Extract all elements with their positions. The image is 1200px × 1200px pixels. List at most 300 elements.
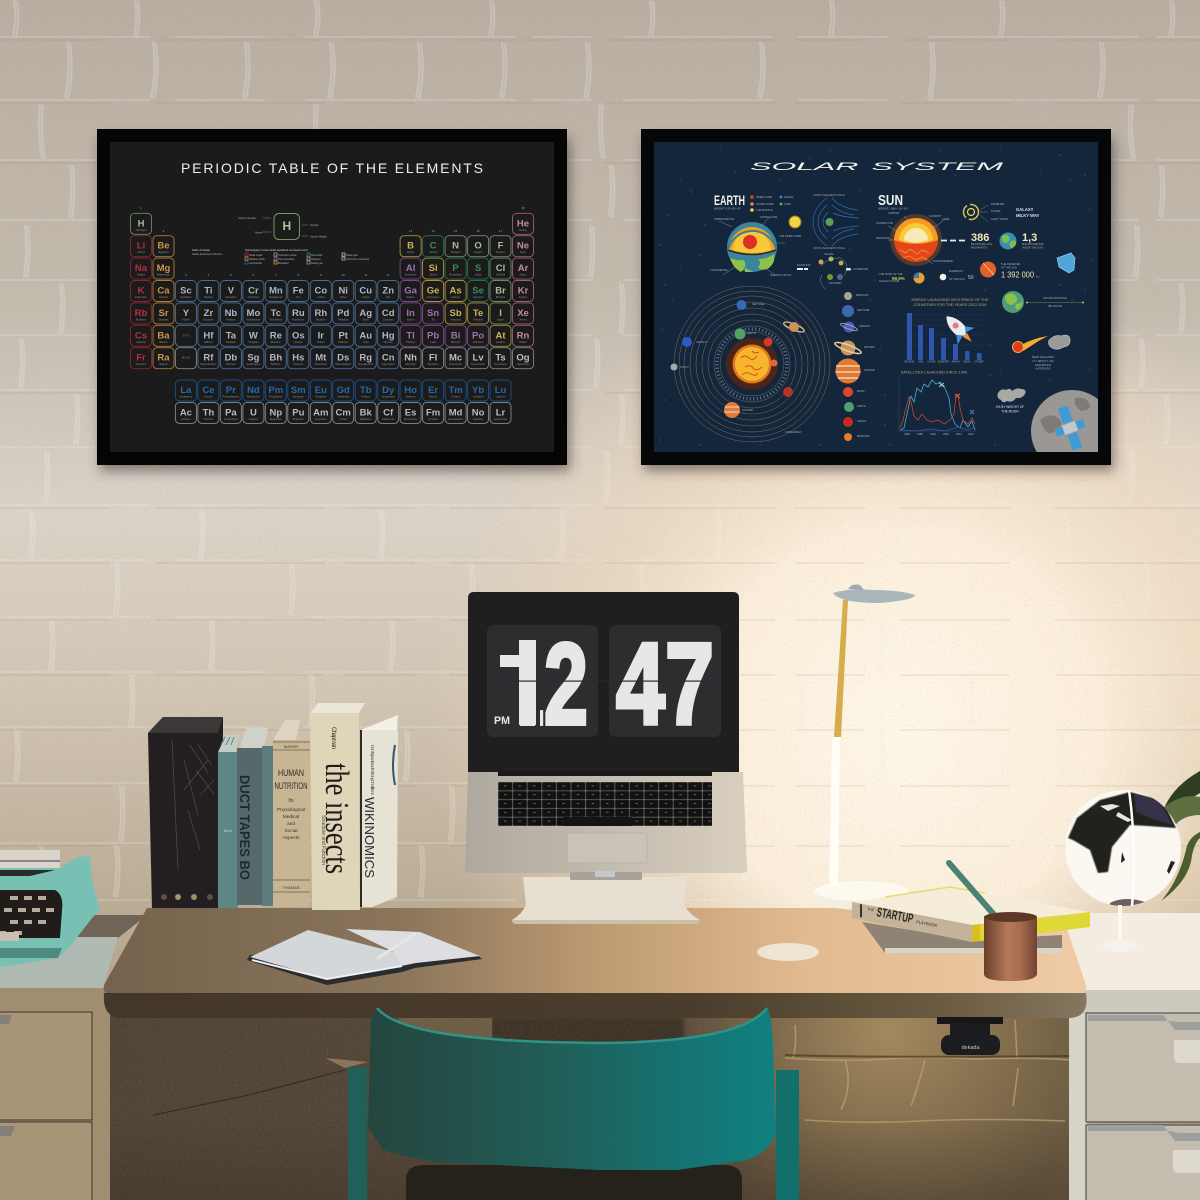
period 6: Caesium: [136, 341, 146, 344]
stat: 386: [971, 232, 992, 250]
period 1: [130, 213, 534, 234]
earth cross section: OUTER CORE: [760, 215, 778, 219]
period 4: Selenium: [473, 296, 483, 299]
period 2: B: [407, 241, 414, 252]
period 6: Gold: [363, 341, 369, 344]
actinides: Californium: [382, 418, 395, 421]
period 5: In: [406, 308, 415, 319]
group numbers: 15: [454, 229, 458, 233]
period 6: Tantalum: [226, 341, 236, 344]
lower drawer: [1086, 1125, 1200, 1200]
cabinet face: [0, 988, 110, 1200]
small earth and stat 1,3: 1,3: [1022, 232, 1037, 244]
cabinet top: [1056, 913, 1200, 990]
moon rocks and caption: [996, 388, 1026, 414]
sun cross section: [876, 211, 953, 266]
small earth and stat 1,3: MILLION EARTHS: [1022, 242, 1044, 246]
lanthanides: Lu: [495, 385, 506, 396]
period 6: Re: [270, 330, 282, 341]
gold pole: [834, 600, 848, 737]
period 7: Oganesson: [517, 363, 530, 366]
lanthanides: Thulium: [451, 396, 460, 398]
period 4: Nickel: [340, 296, 347, 299]
period 7: Darmstadtium: [335, 363, 351, 366]
period 3: P: [452, 263, 459, 274]
element grid: [130, 213, 534, 423]
bar chart: CHINA: [927, 360, 936, 364]
sun: [726, 338, 778, 390]
period 2: Lithium: [137, 251, 145, 254]
actinides: Cm: [336, 407, 351, 418]
period 6: Tungsten: [248, 341, 259, 344]
group numbers: 5: [230, 273, 232, 277]
actinides: Ac: [180, 407, 192, 418]
stat: sun diameter: [980, 262, 1039, 280]
actinides: [175, 402, 511, 423]
lanthanides: Ytterbium: [473, 396, 483, 398]
earth heading: WEIGHT 5.97×10²⁴ KG: [714, 206, 741, 210]
key cell: Atomic Weight: [310, 234, 327, 238]
line chart: 2010: [956, 432, 962, 436]
sun composition charts: [879, 269, 974, 284]
spine with title: [852, 902, 982, 942]
cabinet stile: [1069, 1013, 1087, 1200]
bar chart title: COUNTRIES FOR THE YEARS 2012-2016: [913, 303, 987, 307]
period 1: He: [517, 218, 529, 229]
period 4: Germanium: [427, 296, 440, 299]
actinides: Uranium: [249, 418, 258, 421]
laptop base: [465, 772, 747, 873]
book: the insects: Chapman: [330, 727, 336, 749]
legend: states and subcategories: Noble gas: [346, 253, 358, 257]
period 7: Bh: [269, 353, 282, 364]
period 4: [130, 280, 534, 302]
flip panel left: [487, 625, 598, 737]
globe: [1065, 790, 1181, 952]
period 2: [130, 236, 534, 257]
period 6: Au: [359, 330, 372, 341]
line chart: [899, 378, 976, 436]
group numbers: 16: [477, 229, 480, 233]
trackpad: [567, 833, 647, 863]
group numbers: 11: [364, 273, 368, 277]
period 6: Mercury: [384, 341, 393, 344]
period 2: Ne: [517, 241, 529, 252]
period 7: Ts: [495, 353, 506, 364]
framed poster: solar system: [641, 129, 1113, 472]
actinides: Mendelevium: [448, 418, 463, 421]
book: duct tapes: [237, 728, 268, 905]
screen: [468, 592, 739, 772]
line chart: 1980: [917, 432, 923, 436]
desk clamp: [937, 1017, 1003, 1055]
drawer handles: [0, 1015, 15, 1136]
period 7: Mt: [315, 353, 327, 364]
right page: [346, 929, 480, 966]
period 7: Flerovium: [428, 363, 439, 366]
period 5: Ruthenium: [292, 318, 304, 321]
bar chart: [900, 313, 985, 364]
teal book: Book: [224, 829, 232, 833]
period 5: Indium: [407, 318, 414, 321]
actinides: Pa: [225, 407, 237, 418]
desk top surface: [104, 908, 1086, 996]
period 6: Osmium: [294, 341, 303, 344]
comet and asteroid: FLY ABOUT 1 110: [1032, 359, 1054, 363]
galaxy: GALAXY: [1016, 207, 1034, 212]
galaxy: DIAMETER: [991, 202, 1005, 206]
period 3: Chlorine: [496, 274, 506, 277]
lanthanides: Ho: [404, 385, 417, 396]
period 2: Boron: [407, 251, 415, 254]
period 7: Mc: [449, 353, 462, 364]
galaxy: [964, 202, 1039, 222]
legend: states and subcategories: Metalloid: [278, 261, 289, 265]
typewriter: [0, 850, 100, 967]
chair rim: [377, 1008, 767, 1043]
comet and asteroid: NEAR THE EARTH: [1032, 355, 1054, 359]
earth heading: [714, 193, 745, 210]
period 5: [130, 303, 534, 324]
period 7: Cn: [382, 353, 395, 364]
actinides: Einsteinium: [404, 418, 417, 421]
planet column: SATURN: [864, 345, 875, 349]
sun cross section: CORE: [942, 217, 950, 221]
actinides: Plutonium: [293, 418, 304, 421]
legend: states and subcategories: Subcategory in the metal-metalloid-nonmetal trend: [245, 248, 308, 252]
lanthanides: Samarium: [293, 396, 304, 398]
stat: sun diameter: OF THE SUN: [1001, 266, 1017, 270]
keyboard: [498, 782, 712, 826]
keys: [0, 898, 54, 933]
legend: states and subcategories: Alkali metal: [249, 253, 263, 257]
period 2: Beryllium: [158, 251, 169, 254]
right cabinet: [1056, 913, 1200, 1200]
period 5: Technetium: [269, 318, 282, 321]
poster background: [654, 142, 1098, 452]
period 7: Nh: [404, 353, 417, 364]
period 2: Carbon: [429, 251, 438, 254]
planet column: EARTH: [857, 404, 866, 408]
globe continents: [1068, 792, 1176, 910]
period 5: Niobium: [226, 318, 235, 321]
sun composition charts: 50: [968, 275, 974, 281]
period 6: Cs: [135, 330, 147, 341]
period 5: Zr: [204, 308, 213, 319]
moon rocks and caption: 4% BY WEIGHT OF: [996, 405, 1024, 409]
actinides: Md: [449, 407, 463, 418]
group numbers: 3: [185, 273, 187, 277]
book: wikinomics: WIKINOMICS: [362, 797, 377, 878]
book: human nutrition: [273, 720, 310, 907]
poster background: [110, 142, 554, 452]
actinides: Nobelium: [473, 418, 483, 421]
period 5: Iodine: [497, 318, 505, 321]
lanthanides: Sm: [291, 385, 306, 396]
period 5: Zirconium: [203, 318, 214, 321]
lanthanides: Praseodymium: [223, 396, 239, 398]
period 6: Iridium: [317, 341, 325, 344]
period 5: Rb: [135, 308, 148, 319]
seasons diagram: SIGNAL: [824, 252, 834, 256]
sun cross section: CONVECTIVE: [876, 221, 893, 225]
solar system orbit diagram: KUIPER BELT: [785, 430, 802, 434]
period 2: C: [430, 241, 437, 252]
actinides: Berkelium: [360, 418, 371, 421]
period 5: Te: [473, 308, 483, 319]
period 2: Be: [157, 241, 170, 252]
period 6: 57-71: [183, 334, 190, 337]
period 4: K: [138, 286, 145, 296]
period 2: N: [452, 241, 459, 252]
period 5: Sb: [450, 308, 462, 319]
group numbers: 18: [522, 206, 525, 210]
actinides: Es: [405, 407, 416, 418]
legend: states and subcategories: Noble gas: [311, 261, 323, 265]
book: human nutrition: THOMAS: [282, 885, 300, 890]
period 4: Potassium: [135, 296, 147, 299]
period 5: Y: [183, 308, 190, 319]
period 5: Molybdenum: [246, 318, 261, 321]
actinides: Thorium: [204, 418, 213, 421]
period 7: Meitnerium: [315, 363, 327, 366]
clock digits: [487, 619, 721, 749]
period 4: Gallium: [406, 296, 415, 299]
period 4: Ni: [338, 286, 348, 296]
poster shadows: [100, 138, 1114, 471]
period 5: I: [499, 308, 502, 319]
period 7: Nihonium: [405, 363, 416, 366]
chair: [348, 1008, 799, 1200]
magnetosphere diagram: NORTH MAGNETIC POLE: [813, 193, 845, 197]
actinides: No: [472, 407, 485, 418]
cabinet top: [0, 915, 147, 938]
period 7: Moscovium: [449, 363, 462, 366]
actinides: Curium: [339, 418, 347, 421]
copper cup: [984, 912, 1037, 981]
group numbers: [140, 206, 525, 277]
stat: 386: BILLION BILLION: [971, 242, 992, 246]
sun cross section: PHOTOSPHERE: [933, 259, 953, 263]
group numbers: 7: [275, 273, 277, 277]
actinides: Bk: [360, 407, 372, 418]
poster title: PERIODIC TABLE OF THE ELEMENTS: [181, 160, 483, 176]
actinides: Np: [269, 407, 282, 418]
lanthanides: Neodymium: [247, 396, 260, 398]
bar chart: RUSSIA: [905, 360, 915, 364]
top cover: [852, 887, 1090, 925]
white pole: [829, 737, 840, 886]
period 4: Cr: [248, 286, 259, 296]
pen on notebook: [378, 934, 415, 958]
period 3: [130, 258, 534, 279]
lanthanides: Gd: [337, 385, 350, 396]
wall under the desk: [105, 1010, 1075, 1200]
moon rocks and caption: THE MOON: [1001, 410, 1019, 414]
period 1: Helium: [519, 229, 527, 232]
laptop with clock: [465, 592, 747, 873]
period 5: Rh: [314, 308, 327, 319]
lanthanides: Lutetium: [496, 396, 505, 398]
period 3: Ar: [518, 263, 529, 274]
book: wikinomics: [360, 715, 398, 907]
legend: states and subcategories: Alkaline earth: [249, 257, 265, 261]
magnetosphere diagram: SOUTH MAGNETIC POLE: [813, 246, 845, 250]
period 6: W: [249, 330, 258, 341]
planet column: MERCURY: [856, 293, 869, 297]
desk front edge: [104, 993, 1087, 1018]
lanthanides: Gadolinium: [337, 396, 350, 398]
solar system orbit diagram: [670, 286, 830, 442]
period 6: Os: [292, 330, 305, 341]
sun composition charts: THE MASS OF THE: [879, 272, 903, 276]
actinides: Cf: [383, 407, 394, 418]
sun composition charts: OF THE SUN: [949, 277, 965, 281]
coaster: [757, 943, 819, 961]
period 5: Cd: [382, 308, 395, 319]
galaxy: LIGHT YEARS: [991, 217, 1008, 221]
period 3: Sulfur: [475, 274, 482, 277]
lanthanides: Ce: [202, 385, 214, 396]
actinides: Americium: [315, 418, 327, 421]
group numbers: 10: [342, 273, 345, 277]
period 7: Ds: [337, 353, 349, 364]
period 7: Fr: [136, 353, 146, 364]
planet column: JUPITER: [864, 368, 875, 372]
typewriter body: [0, 856, 100, 967]
book: human nutrition: and: [287, 821, 295, 827]
seasons diagram: CROSSED: [829, 281, 842, 285]
period 6: Hafnium: [204, 341, 213, 344]
seasons diagram: [797, 252, 868, 289]
small sun: [789, 216, 801, 228]
lower drawer: [0, 1122, 92, 1200]
bar chart title: [911, 298, 989, 307]
period 6: Bi: [451, 330, 460, 341]
earth with distance line: [1002, 291, 1084, 313]
period 4: Ge: [427, 286, 439, 296]
period 7: Db: [225, 353, 237, 364]
period 5: Ag: [359, 308, 372, 319]
period 5: Antimony: [450, 318, 462, 321]
book: wikinomics: Don Tapscott and Anthony D. Williams: [370, 745, 375, 796]
actinides: Neptunium: [270, 418, 282, 421]
period 6: Rhenium: [271, 341, 281, 344]
legend: states and subcategories: [192, 248, 370, 265]
line chart: 2000: [943, 432, 949, 436]
actinides: U: [250, 407, 257, 418]
period 6: Bismuth: [451, 341, 461, 344]
seasons diagram: EQUATION: [797, 263, 810, 267]
period 5: Sn: [427, 308, 439, 319]
group numbers: 14: [432, 229, 435, 233]
period 6: Polonium: [473, 341, 483, 344]
period 6: Pb: [427, 330, 439, 341]
left cabinet: [0, 915, 147, 1200]
plant leaves: [1161, 771, 1200, 901]
planet column: VENUS: [857, 419, 866, 423]
period 2: Neon: [520, 251, 527, 254]
book: human nutrition: Medical: [283, 814, 299, 820]
earth cross section: UPPER MANTLE: [714, 217, 734, 221]
planet column: URANUS: [859, 324, 870, 328]
stat: sun diameter: km: [1036, 274, 1039, 278]
book: the insects: Structure and Function: [320, 815, 326, 865]
solar system orbit diagram: EARTH: [747, 331, 756, 335]
planet column: MERCURY: [857, 434, 870, 438]
group numbers: 12: [387, 273, 390, 277]
period 4: Ti: [204, 286, 213, 296]
period 6: Ir: [318, 330, 324, 341]
period 5: Xenon: [519, 318, 527, 321]
period 6: Po: [472, 330, 484, 341]
period 7: Livermorium: [471, 363, 485, 366]
period 4: Ga: [404, 286, 418, 296]
lanthanides: Lanthanum: [180, 396, 192, 398]
period 4: Br: [495, 286, 506, 296]
sun composition charts: SOLAR SYSTEM: [879, 279, 899, 283]
seat: [406, 1165, 742, 1200]
desk: [104, 908, 1087, 1055]
book: duct tapes: DUCT TAPES BO: [237, 775, 253, 880]
flip panel right: [609, 625, 721, 737]
period 6: Lead: [430, 341, 436, 344]
period 2: Li: [137, 241, 145, 252]
solar system orbit diagram: URANUS: [696, 340, 707, 344]
sun composition charts: ELEMENTS: [949, 269, 963, 273]
period 2: Fluorine: [496, 251, 506, 254]
poster title: solar system: [750, 157, 1005, 174]
period 6: Pt: [338, 330, 349, 341]
spine with title: THE: [867, 907, 875, 912]
period 5: Pd: [337, 308, 349, 319]
lanthanides: Erbium: [429, 396, 437, 398]
PM label: PM: [494, 715, 510, 727]
period 7: Radium: [159, 363, 168, 366]
drawer cutouts: [1173, 1040, 1200, 1173]
lanthanides: Promethium: [269, 396, 283, 398]
legend: states and subcategories: State of matter: [192, 248, 210, 252]
period 3: Sodium: [137, 274, 145, 277]
earth legend: OCEAN: [784, 195, 793, 199]
bar chart: USA: [918, 360, 923, 364]
book: human nutrition: Aspects: [282, 835, 300, 841]
globe ring: [1129, 790, 1134, 906]
period 4: Zn: [382, 286, 394, 296]
lamp base: [813, 882, 909, 910]
period 5: Sr: [158, 308, 169, 319]
period 4: Arsenic: [451, 296, 461, 299]
lanthanides: Tm: [448, 385, 463, 396]
paper: [0, 850, 60, 868]
period 4: Co: [314, 286, 327, 296]
period 5: Tc: [271, 308, 281, 319]
book: the insects: the insects: [318, 763, 355, 874]
period 7: Rg: [359, 353, 372, 364]
laptop stand: [512, 871, 700, 924]
earth cross section: [710, 215, 801, 277]
period 7: Copernicium: [381, 363, 395, 366]
period 4: Cu: [359, 286, 372, 296]
period 7: Ra: [157, 353, 170, 364]
period 2: Oxygen: [474, 251, 483, 254]
legend: states and subcategories: Transition metal: [278, 253, 297, 257]
pen: [949, 863, 996, 917]
group numbers: 13: [409, 229, 413, 233]
upper drawer: [1086, 1013, 1200, 1122]
period 6: At: [495, 330, 506, 341]
period 1: H: [138, 218, 145, 229]
